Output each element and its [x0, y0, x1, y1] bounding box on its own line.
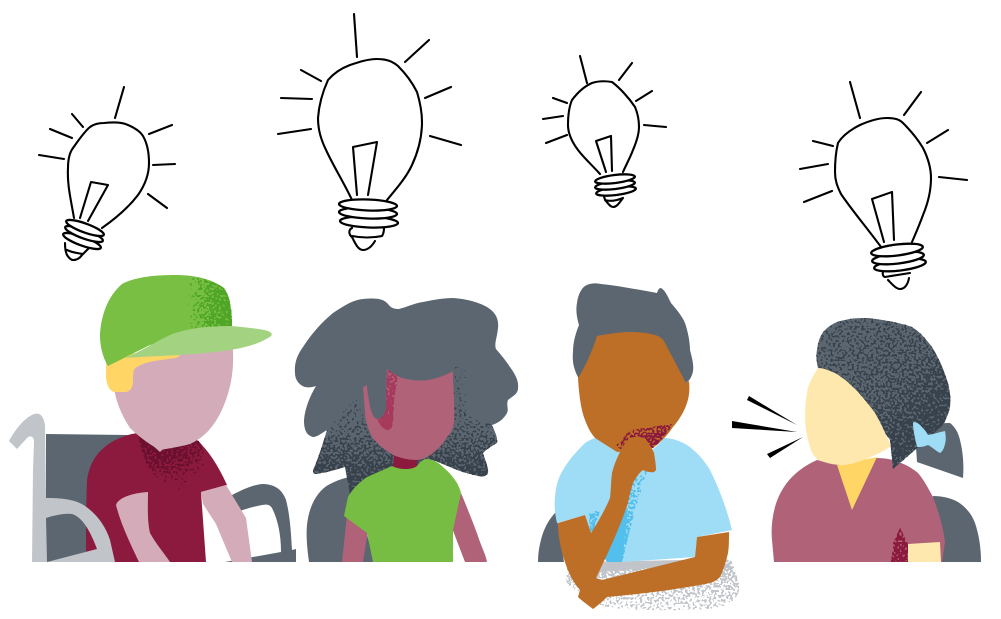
stipple ground shadow — [566, 560, 739, 610]
shirt — [555, 438, 732, 562]
glass outline — [568, 81, 639, 174]
filament — [80, 182, 108, 221]
shirt shadow stipple — [138, 433, 204, 490]
left arm — [116, 492, 170, 562]
hair — [573, 283, 693, 383]
hair — [816, 318, 950, 469]
neck — [837, 457, 877, 510]
sleeve shadow stipple — [891, 528, 908, 562]
hair lock over face — [362, 368, 387, 419]
solid grey strip under shirt — [590, 559, 728, 572]
glass outline — [318, 59, 422, 200]
screw base — [883, 272, 910, 289]
screw base — [603, 193, 623, 207]
cap brim — [125, 326, 272, 358]
glass outline — [835, 118, 931, 247]
bow — [913, 422, 946, 453]
face — [114, 340, 233, 450]
coils — [62, 230, 102, 252]
hair shadow stipple — [816, 318, 950, 469]
light bulb 4 — [800, 82, 967, 289]
right arm — [201, 485, 252, 562]
person 2: woman with long grey hair and green shirt — [295, 298, 518, 562]
shirt fold solid — [596, 508, 628, 562]
shirt — [772, 458, 945, 562]
wheelchair right armrest — [225, 484, 296, 562]
left arm — [342, 515, 368, 562]
screw base — [65, 243, 89, 260]
person 3: man thinking with hand on chin — [538, 283, 739, 610]
face — [363, 369, 454, 460]
hair — [106, 350, 182, 392]
wheelchair frame — [9, 414, 115, 562]
person 1: man in wheelchair with green cap — [9, 275, 296, 562]
shirt — [86, 433, 227, 562]
face — [805, 368, 891, 465]
filament — [596, 136, 612, 172]
chair — [538, 512, 564, 562]
rays — [543, 56, 666, 143]
chair — [933, 496, 981, 562]
coils — [874, 256, 926, 274]
rays — [278, 14, 461, 145]
hair shadow stipple — [313, 363, 497, 495]
ponytail — [915, 423, 963, 478]
wheelchair seat back — [46, 434, 130, 562]
glass outline — [68, 122, 149, 228]
cap crown — [100, 275, 232, 366]
light bulb 3 — [543, 56, 666, 207]
chair — [307, 477, 375, 562]
neck — [393, 455, 417, 471]
light bulb 2 — [278, 14, 461, 250]
filament — [353, 142, 377, 195]
collar point — [140, 434, 168, 452]
filament — [872, 192, 894, 242]
hair — [295, 298, 518, 495]
screw base — [349, 228, 384, 250]
shirt fold stipple — [589, 468, 648, 562]
chin shadow stipple — [616, 424, 672, 452]
rays — [39, 87, 175, 208]
light bulb 1 — [39, 87, 175, 260]
coils — [340, 215, 398, 229]
face — [578, 332, 689, 452]
shirt — [344, 459, 461, 562]
forearm — [908, 542, 941, 562]
right arm — [452, 493, 487, 562]
rays — [800, 82, 967, 202]
speech lines — [732, 396, 803, 458]
cheek shadow stipple — [377, 369, 398, 430]
person 4: woman speaking with ponytail — [732, 318, 981, 562]
arm and hand — [558, 437, 729, 609]
cap shadow stipple — [186, 276, 232, 328]
coils — [596, 185, 636, 197]
